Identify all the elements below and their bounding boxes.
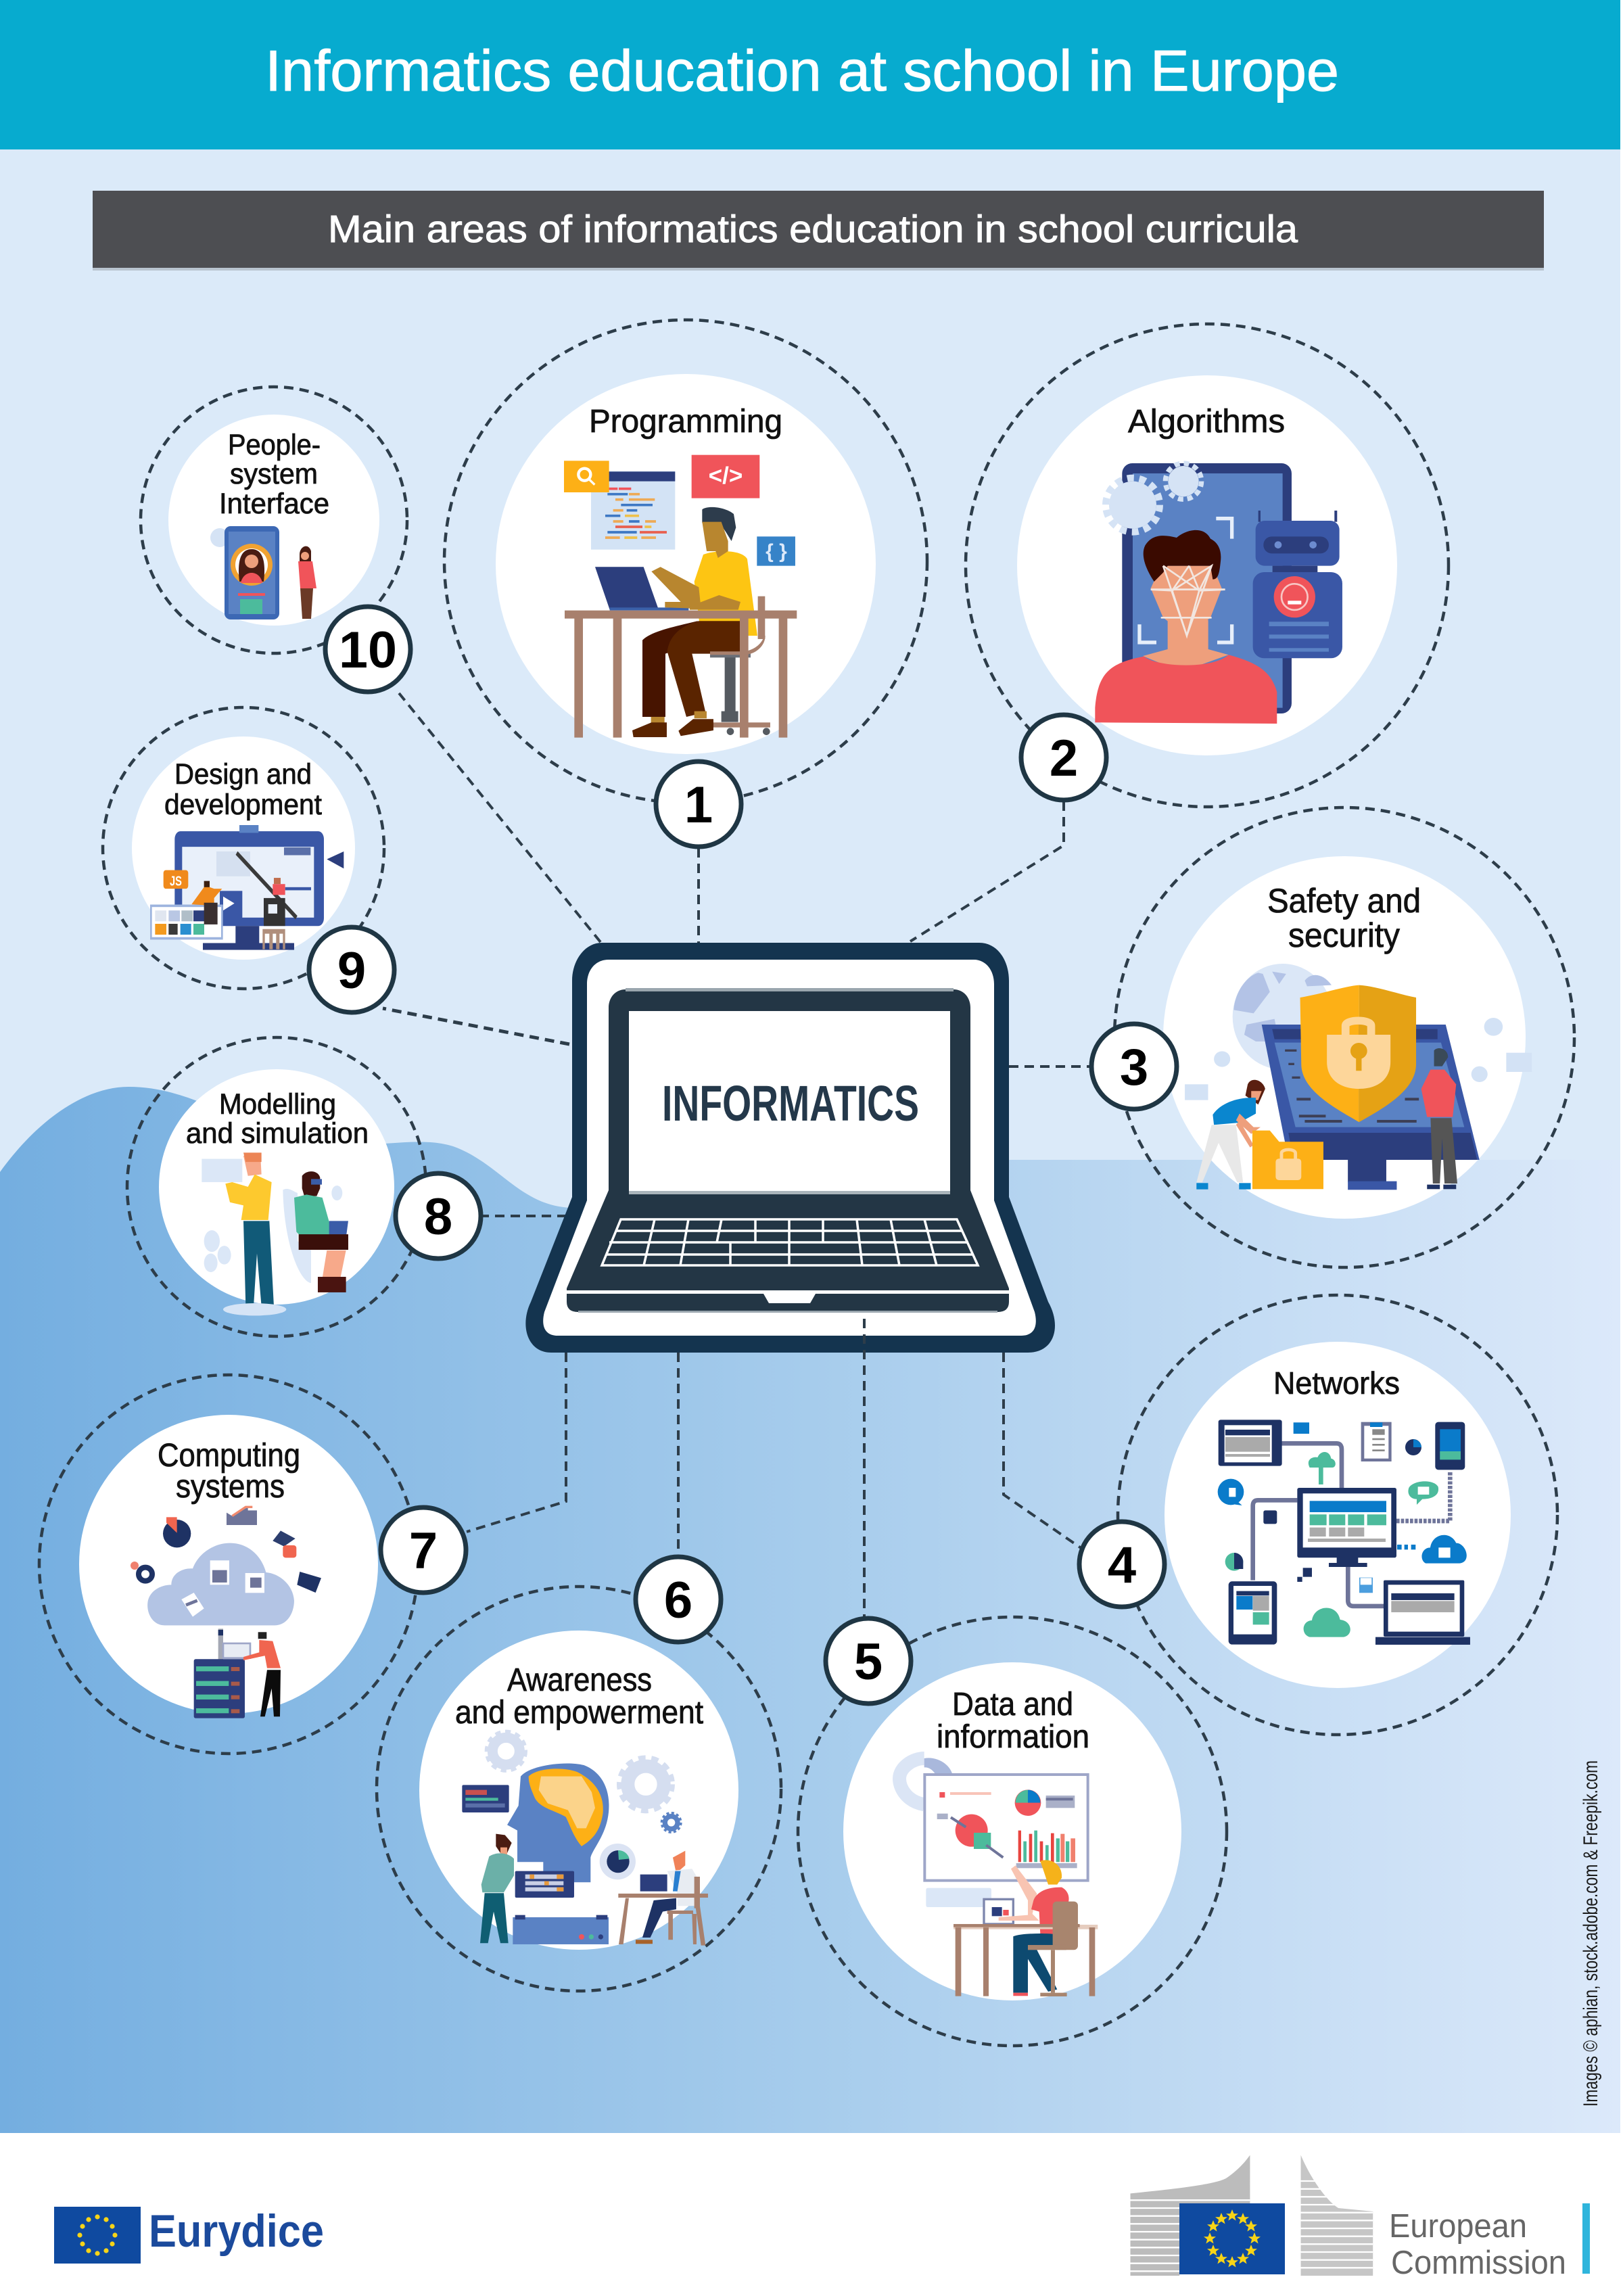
dashed ring xyxy=(377,1587,781,1991)
illustration: programmer at desk: </> xyxy=(709,463,743,489)
dashed ring xyxy=(444,320,927,803)
illustration: face recognition and robot xyxy=(1095,463,1342,724)
badge 5 xyxy=(826,1618,911,1704)
laptop: INFORMATICS xyxy=(525,943,1055,1353)
badge 5: 5 xyxy=(854,1633,883,1691)
badge 9: 9 xyxy=(337,942,366,1000)
heading xyxy=(158,1438,300,1505)
EU flag large xyxy=(1179,2203,1285,2274)
badge 4: 4 xyxy=(1108,1537,1136,1594)
connector lines xyxy=(383,693,1090,1555)
badge 2 xyxy=(1021,715,1106,800)
illustration: modelling figures xyxy=(202,1152,348,1315)
heading: security xyxy=(1288,916,1400,954)
badge 7: 7 xyxy=(409,1522,438,1580)
dashed ring xyxy=(141,387,407,653)
panel: Safety and security xyxy=(1114,807,1574,1267)
heading: systems xyxy=(176,1469,285,1505)
illustration: connected devices xyxy=(1218,1420,1470,1645)
heading: Interface xyxy=(219,488,329,520)
footer xyxy=(0,2133,1623,2296)
illustration: person analysing charts xyxy=(899,1758,1098,1996)
laptop inner bezel xyxy=(543,960,1036,1336)
connector line: laptop to 5 xyxy=(863,1319,866,1620)
heading: Data and xyxy=(952,1687,1073,1723)
badge 10 xyxy=(325,607,410,692)
heading: Modelling xyxy=(219,1088,336,1121)
heading: Design and xyxy=(174,758,312,791)
laptop outer body xyxy=(525,943,1055,1353)
heading xyxy=(219,429,329,520)
heading: Awareness xyxy=(507,1662,652,1698)
badge 3: 3 xyxy=(1120,1039,1148,1096)
base line and trackpad notch xyxy=(567,1290,1009,1294)
badge 1: 1 xyxy=(684,776,713,834)
illustration: video-call phone xyxy=(210,526,316,619)
panel: Modelling and simulation xyxy=(127,1037,426,1336)
wordmark xyxy=(1389,2208,1566,2281)
illustration: programmer at desk: { } xyxy=(766,540,787,563)
panel: Awareness and empowerment xyxy=(377,1587,781,1991)
dashed ring xyxy=(966,324,1449,807)
badge 8: 8 xyxy=(424,1188,452,1246)
heading: Networks xyxy=(1273,1365,1400,1401)
background wave xyxy=(0,1087,1620,2133)
badge 10: 10 xyxy=(339,622,397,679)
badge 6: 6 xyxy=(664,1572,692,1629)
subtitle text: Main areas of informatics education in school curricula xyxy=(328,208,1298,251)
heading: development xyxy=(164,789,322,821)
illustration: designers at monitor xyxy=(151,825,344,950)
heading xyxy=(455,1662,703,1731)
panel: Data and information xyxy=(798,1617,1227,2046)
dashed ring xyxy=(39,1375,418,1754)
white disc xyxy=(168,415,379,626)
Eurydice logo xyxy=(54,2205,324,2264)
white disc xyxy=(1017,375,1397,755)
keyboard grid xyxy=(602,1219,978,1265)
white disc xyxy=(159,1069,394,1305)
heading: system xyxy=(230,458,318,490)
laptop screen and deck xyxy=(567,989,1009,1312)
panel: Networks xyxy=(1118,1295,1557,1735)
dashed ring xyxy=(127,1037,426,1336)
white disc xyxy=(419,1631,738,1950)
panel: Algorithms xyxy=(966,324,1449,807)
badge 2: 2 xyxy=(1050,730,1078,787)
dashed ring xyxy=(1118,1295,1557,1735)
heading xyxy=(164,758,322,821)
laptop screen xyxy=(629,1011,950,1194)
illustration: designers at monitor: JS xyxy=(170,873,182,889)
subtitle banner xyxy=(93,191,1544,271)
dashed ring xyxy=(798,1617,1227,2046)
white disc xyxy=(1165,1342,1511,1688)
white disc xyxy=(843,1662,1181,2000)
title: Informatics education at school in Europe xyxy=(265,39,1339,103)
badge 7 xyxy=(381,1507,466,1593)
blue bar xyxy=(1582,2203,1590,2274)
badge 3 xyxy=(1091,1024,1177,1109)
heading: information xyxy=(937,1719,1089,1755)
panel: Design and development xyxy=(103,707,384,989)
Eurydice wordmark: Eurydice xyxy=(149,2205,324,2257)
Berlaymont building graphic xyxy=(1131,2155,1373,2276)
heading: Programming xyxy=(589,404,782,440)
panel: Computing systems xyxy=(39,1375,418,1754)
white disc xyxy=(1163,856,1526,1219)
badge 4 xyxy=(1079,1522,1165,1607)
illustration: cloud and server xyxy=(131,1507,321,1718)
badge 9 xyxy=(309,927,394,1012)
heading xyxy=(186,1088,369,1150)
dashed ring xyxy=(1114,807,1574,1267)
heading xyxy=(937,1687,1089,1755)
illustration: programmer at desk xyxy=(564,455,797,738)
header band xyxy=(0,0,1620,149)
badge 6 xyxy=(636,1557,721,1642)
white disc xyxy=(132,736,355,960)
white disc xyxy=(79,1415,378,1714)
wordmark: Commission xyxy=(1391,2245,1566,2281)
heading: Algorithms xyxy=(1128,404,1285,440)
heading: and empowerment xyxy=(455,1695,703,1731)
badge 8 xyxy=(396,1173,481,1259)
illustration: head with brain and people xyxy=(462,1732,708,1946)
EU flag small xyxy=(54,2207,141,2264)
illustration: shield, monitor and people xyxy=(1185,964,1532,1190)
screen label: INFORMATICS xyxy=(662,1075,919,1131)
dashed ring xyxy=(103,707,384,989)
heading: Safety and xyxy=(1267,882,1421,920)
white disc xyxy=(496,374,876,754)
image credit: Images © aphian, stock.adobe.com & Freepik.com xyxy=(1580,1760,1602,2107)
panel: People-system Interface xyxy=(141,387,407,653)
heading: and simulation xyxy=(186,1117,369,1150)
panel: Programming xyxy=(444,320,927,803)
European Commission logo xyxy=(1131,2155,1590,2281)
heading: Computing xyxy=(158,1438,300,1474)
heading: People- xyxy=(228,429,321,461)
heading xyxy=(1267,882,1421,954)
wordmark: European xyxy=(1389,2208,1527,2245)
badge 1 xyxy=(656,762,741,847)
